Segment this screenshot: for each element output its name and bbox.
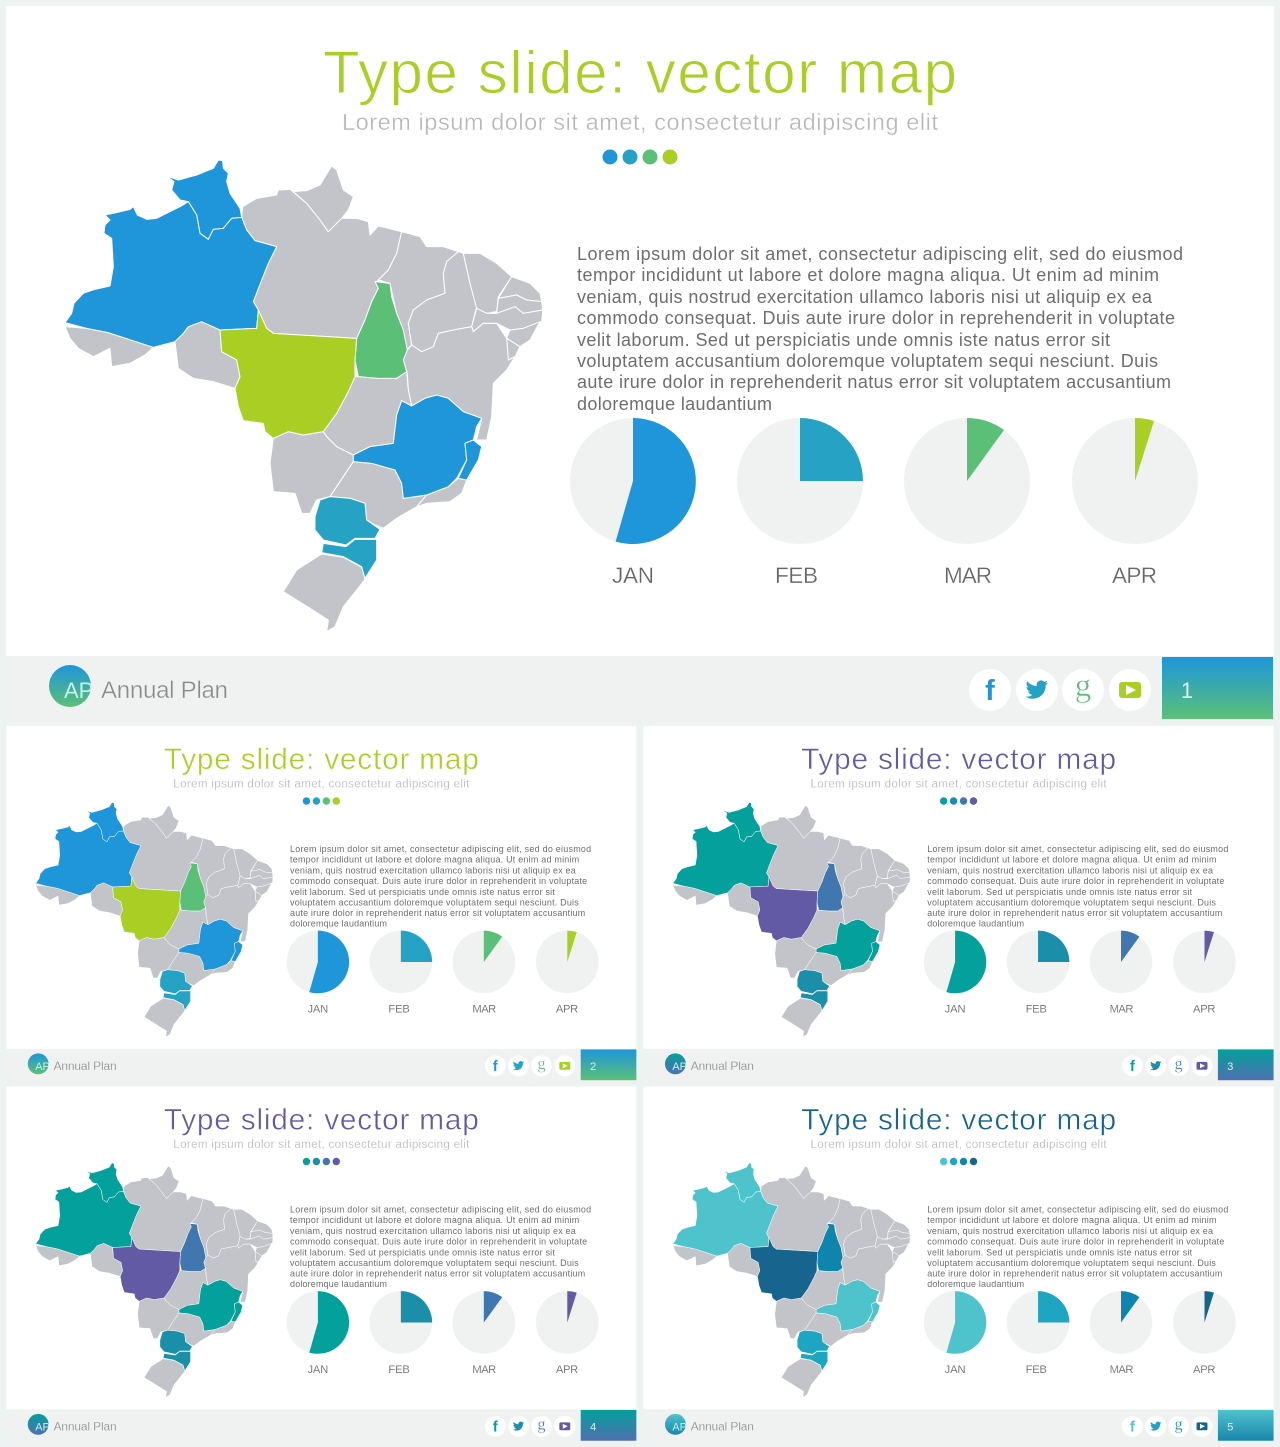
brand name: Annual Plan — [691, 1059, 754, 1073]
pie: APR: APR — [1112, 563, 1157, 588]
icon: facebook: f — [985, 675, 995, 707]
body text: Lorem ipsum dolor sit amet, consectetur adipiscing elit, sed do eiusmod — [290, 844, 591, 854]
body text: commodo consequat. Duis aute irure dolor in reprehenderit in voluptate — [577, 308, 1175, 328]
body text: aute irure dolor in reprehenderit natus error sit voluptatem accusantium — [290, 1268, 585, 1278]
dots — [940, 1158, 977, 1165]
slide panel — [6, 6, 1274, 656]
body text: aute irure dolor in reprehenderit natus error sit voluptatem accusantium — [577, 372, 1171, 392]
brand name: Annual Plan — [54, 1419, 117, 1433]
pie: FEB: FEB — [775, 563, 818, 588]
footer — [6, 1049, 636, 1086]
footer — [644, 1049, 1274, 1086]
logo — [665, 1414, 687, 1435]
brand name: Annual Plan — [691, 1419, 754, 1433]
logo — [49, 665, 93, 707]
pie: FEB: FEB — [388, 1004, 410, 1016]
pie: JAN: JAN — [945, 1364, 966, 1376]
body text: tempor incididunt ut labore et dolore magna aliqua. Ut enim ad minim — [577, 265, 1159, 285]
icon: facebook: f — [493, 1419, 498, 1435]
slide panel — [644, 1086, 1274, 1409]
body text: velit laborum. Sed ut perspiciatis unde omnis iste natus error sit — [577, 330, 1110, 350]
logo — [665, 1053, 687, 1074]
body text: velit laborum. Sed ut perspiciatis unde omnis iste natus error sit — [927, 1247, 1193, 1257]
pie: MAR: MAR — [472, 1364, 496, 1376]
slide 3 — [644, 726, 1274, 1086]
pie: JAN — [924, 1291, 986, 1376]
pie: FEB — [1007, 1291, 1069, 1376]
body text: Lorem ipsum dolor sit amet, consectetur adipiscing elit, sed do eiusmod — [577, 244, 1183, 264]
state: Rondonia — [175, 322, 240, 388]
subtitle: Lorem ipsum dolor sit amet, consectetur adipiscing elit — [811, 778, 1107, 791]
title: Type slide: vector map — [164, 743, 479, 776]
icon: google: g — [537, 1054, 546, 1073]
pie: APR: APR — [1193, 1004, 1215, 1016]
map: Brazil — [65, 160, 543, 632]
pie: JAN: JAN — [945, 1004, 966, 1016]
state: Amazonas — [65, 202, 277, 347]
body text: commodo consequat. Duis aute irure dolor in reprehenderit in voluptate — [927, 876, 1224, 886]
pie: FEB: FEB — [1026, 1004, 1047, 1016]
slide panel — [6, 1086, 636, 1409]
icon: google: g — [1175, 1054, 1183, 1073]
icon: facebook: f — [493, 1059, 498, 1075]
pie: MAR — [904, 418, 1030, 588]
state: Amapa — [293, 166, 353, 232]
footer — [6, 656, 1274, 724]
page number: 5 — [1227, 1421, 1233, 1433]
body text: voluptatem accusantium doloremque voluptatem sequi nesciunt. Duis — [577, 351, 1158, 371]
body text — [290, 844, 591, 929]
brand name: Annual Plan — [54, 1059, 117, 1073]
body text: veniam, quis nostrud exercitation ullamco laboris nisi ut aliquip ex ea — [290, 866, 576, 876]
body text: tempor incididunt ut labore et dolore magna aliqua. Ut enim ad minim — [290, 1215, 579, 1225]
icon: facebook — [1122, 1055, 1143, 1076]
body text: velit laborum. Sed ut perspiciatis unde omnis iste natus error sit — [290, 887, 555, 897]
body text: velit laborum. Sed ut perspiciatis unde omnis iste natus error sit — [290, 1247, 555, 1257]
page number — [1218, 1410, 1274, 1441]
pie: MAR — [453, 931, 515, 1016]
state: Bahia — [403, 323, 515, 440]
pie: FEB — [737, 418, 863, 588]
state: Goias — [323, 372, 412, 455]
slide panel — [6, 726, 636, 1049]
icon: google: g — [1075, 668, 1091, 704]
dots — [303, 797, 340, 805]
icon: google — [1168, 1054, 1189, 1076]
logo — [28, 1053, 50, 1074]
state: Paraiba — [497, 295, 543, 313]
pie: APR — [536, 931, 599, 1016]
page number: 2 — [590, 1061, 596, 1073]
pie: APR — [536, 1291, 599, 1376]
icon: google — [1168, 1414, 1189, 1437]
body text: voluptatem accusantium doloremque voluptatem sequi nesciunt. Duis — [927, 897, 1216, 907]
slide 2 — [6, 726, 636, 1086]
body text: veniam, quis nostrud exercitation ullamco laboris nisi ut aliquip ex ea — [927, 1226, 1213, 1236]
state: Mato Grosso do Sul — [270, 432, 353, 513]
body text: aute irure dolor in reprehenderit natus error sit voluptatem accusantium — [927, 908, 1222, 918]
icon: facebook: f — [1130, 1419, 1135, 1435]
page number: 1 — [1181, 678, 1193, 703]
state: Mato Grosso — [220, 310, 357, 438]
body text: commodo consequat. Duis aute irure dolor in reprehenderit in voluptate — [290, 1236, 587, 1246]
state: Rio Grande do Norte — [498, 277, 542, 302]
state: Pernambuco — [472, 307, 543, 332]
logo: AP — [35, 1061, 50, 1073]
body text: doloremque laudantium — [290, 1279, 387, 1289]
icon: twitter — [508, 1416, 529, 1437]
pie: MAR: MAR — [944, 563, 992, 588]
state: Parana — [315, 497, 380, 545]
icon: google — [531, 1414, 552, 1437]
icon: twitter — [1145, 1055, 1166, 1076]
state: Alagoas — [507, 322, 540, 347]
body text: voluptatem accusantium doloremque voluptatem sequi nesciunt. Duis — [927, 1258, 1216, 1268]
slide panel — [644, 726, 1274, 1049]
body text: voluptatem accusantium doloremque voluptatem sequi nesciunt. Duis — [290, 1258, 579, 1268]
state: Maranhao — [378, 232, 458, 350]
state: Roraima — [167, 160, 242, 239]
title: Type slide: vector map — [323, 39, 957, 106]
icon: facebook — [969, 669, 1011, 711]
icon: twitter — [1016, 669, 1058, 711]
body text: doloremque laudantium — [927, 1279, 1024, 1289]
page number — [1162, 657, 1273, 719]
map: Brazil — [673, 803, 910, 1037]
title: Type slide: vector map — [801, 743, 1116, 776]
dots — [303, 1158, 340, 1165]
page number — [581, 1410, 636, 1441]
body text: tempor incididunt ut labore et dolore magna aliqua. Ut enim ad minim — [927, 1215, 1216, 1225]
page number — [1218, 1049, 1274, 1080]
pie: JAN — [287, 931, 349, 1016]
pie: FEB: FEB — [1026, 1364, 1047, 1376]
state: Ceara — [463, 253, 512, 313]
body text: Lorem ipsum dolor sit amet, consectetur adipiscing elit, sed do eiusmod — [290, 1205, 591, 1215]
icon: facebook — [1122, 1416, 1143, 1437]
icon: youtube — [554, 1055, 575, 1076]
icon: google — [1062, 668, 1104, 711]
footer — [644, 1409, 1274, 1446]
body text — [927, 1205, 1228, 1289]
body text — [577, 244, 1183, 414]
subtitle: Lorem ipsum dolor sit amet, consectetur adipiscing elit — [811, 1138, 1107, 1151]
pie: MAR: MAR — [1110, 1364, 1133, 1376]
pie: JAN — [287, 1291, 349, 1376]
state: Rio de Janeiro — [417, 478, 467, 507]
body text: commodo consequat. Duis aute irure dolor in reprehenderit in voluptate — [290, 876, 587, 886]
title: Type slide: vector map — [164, 1104, 479, 1137]
body text: veniam, quis nostrud exercitation ullamco laboris nisi ut aliquip ex ea — [577, 287, 1153, 307]
body text: veniam, quis nostrud exercitation ullamco laboris nisi ut aliquip ex ea — [927, 866, 1213, 876]
pie: APR — [1072, 418, 1198, 588]
pie: APR: APR — [556, 1364, 578, 1376]
slide 1 — [6, 6, 1274, 724]
logo: AP — [672, 1061, 687, 1073]
icon: facebook — [485, 1055, 506, 1076]
map: Brazil — [673, 1163, 910, 1397]
icon: google: g — [1175, 1414, 1183, 1433]
icon: twitter — [508, 1055, 529, 1076]
title: Type slide: vector map — [801, 1104, 1116, 1137]
body text: tempor incididunt ut labore et dolore magna aliqua. Ut enim ad minim — [290, 855, 579, 865]
dots — [940, 797, 977, 805]
state: Espirito Santo — [458, 440, 482, 480]
slide 5 — [644, 1086, 1274, 1446]
logo: AP — [672, 1421, 687, 1433]
logo: AP — [64, 678, 93, 703]
body text: aute irure dolor in reprehenderit natus error sit voluptatem accusantium — [927, 1268, 1222, 1278]
pie: MAR — [1090, 931, 1152, 1016]
logo — [28, 1414, 50, 1435]
state: Rio Grande do Sul — [283, 554, 365, 632]
icon: google — [531, 1054, 552, 1076]
body text: commodo consequat. Duis aute irure dolor in reprehenderit in voluptate — [927, 1236, 1224, 1246]
body text: doloremque laudantium — [927, 919, 1024, 929]
pie: APR — [1173, 931, 1236, 1016]
logo: AP — [35, 1421, 50, 1433]
pie: APR: APR — [1193, 1364, 1215, 1376]
pie: JAN: JAN — [612, 563, 654, 588]
pie: FEB — [370, 931, 432, 1016]
state: Santa Catarina — [322, 539, 377, 578]
state: Piaui — [408, 252, 477, 352]
pie: FEB — [1007, 931, 1069, 1016]
brand name: Annual Plan — [101, 677, 228, 704]
map: Brazil — [36, 803, 273, 1037]
icon: google: g — [537, 1414, 546, 1433]
page number: 4 — [590, 1421, 596, 1433]
pie: MAR — [1090, 1291, 1152, 1376]
pie: JAN — [570, 418, 696, 588]
icon: facebook: f — [1130, 1059, 1135, 1075]
state: Para — [242, 189, 402, 338]
map: Brazil — [36, 1163, 273, 1397]
dots — [602, 150, 678, 164]
pie: APR: APR — [556, 1004, 578, 1016]
pie: JAN — [924, 931, 986, 1016]
state: Minas Gerais — [353, 395, 482, 498]
body text: aute irure dolor in reprehenderit natus error sit voluptatem accusantium — [290, 908, 585, 918]
icon: youtube — [1192, 1055, 1212, 1076]
subtitle: Lorem ipsum dolor sit amet, consectetur adipiscing elit — [342, 109, 938, 135]
body text: voluptatem accusantium doloremque voluptatem sequi nesciunt. Duis — [290, 897, 579, 907]
state: Acre — [65, 327, 153, 367]
state: Sergipe — [507, 338, 520, 360]
pie: FEB — [370, 1291, 432, 1376]
state: Sao Paulo — [330, 462, 427, 528]
body text — [290, 1205, 591, 1289]
icon: facebook — [485, 1416, 506, 1437]
body text: Lorem ipsum dolor sit amet, consectetur adipiscing elit, sed do eiusmod — [927, 844, 1228, 854]
pie: APR — [1173, 1291, 1236, 1376]
icon: twitter — [1145, 1416, 1166, 1437]
body text: tempor incididunt ut labore et dolore magna aliqua. Ut enim ad minim — [927, 855, 1216, 865]
pie: MAR — [453, 1291, 515, 1376]
body text — [927, 844, 1228, 929]
slide 4 — [6, 1086, 636, 1446]
pie: JAN: JAN — [307, 1004, 328, 1016]
icon: youtube — [1192, 1416, 1212, 1437]
icon: youtube — [1109, 669, 1151, 711]
pie: JAN: JAN — [307, 1364, 328, 1376]
body text: velit laborum. Sed ut perspiciatis unde omnis iste natus error sit — [927, 887, 1193, 897]
subtitle: Lorem ipsum dolor sit amet, consectetur adipiscing elit — [173, 778, 470, 791]
body text: veniam, quis nostrud exercitation ullamco laboris nisi ut aliquip ex ea — [290, 1226, 576, 1236]
subtitle: Lorem ipsum dolor sit amet, consectetur adipiscing elit — [173, 1138, 470, 1151]
pie: MAR: MAR — [1110, 1004, 1133, 1016]
footer — [6, 1409, 636, 1446]
body text: doloremque laudantium — [577, 394, 772, 414]
page number — [581, 1049, 636, 1080]
body text: doloremque laudantium — [290, 919, 387, 929]
icon: youtube — [554, 1416, 575, 1437]
pie: FEB: FEB — [388, 1364, 410, 1376]
page number: 3 — [1227, 1061, 1233, 1073]
body text: Lorem ipsum dolor sit amet, consectetur adipiscing elit, sed do eiusmod — [927, 1205, 1228, 1215]
pie: MAR: MAR — [472, 1004, 496, 1016]
state: Tocantins — [355, 282, 407, 378]
